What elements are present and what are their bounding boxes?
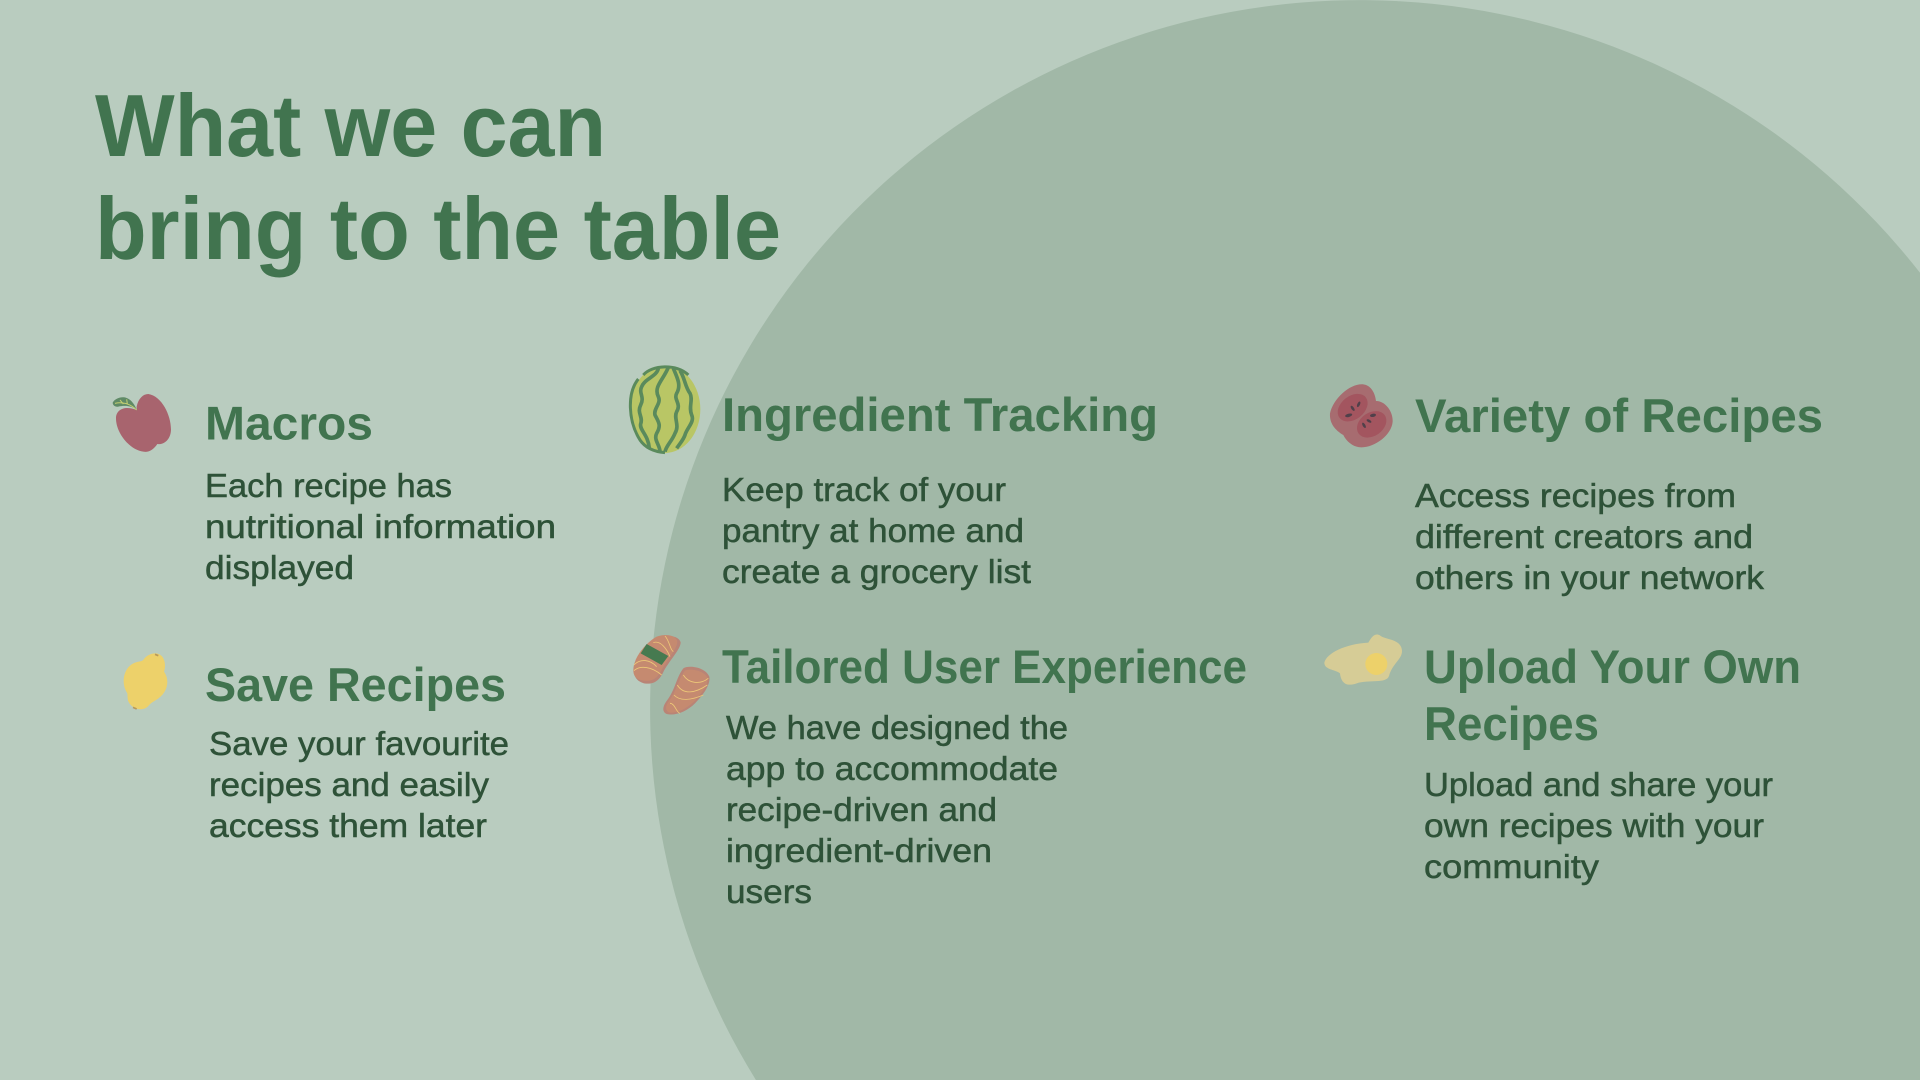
text: macros description: Each recipe has (205, 467, 452, 504)
text: variety of recipes description: Access recipes from (1415, 477, 1736, 514)
icon: fried egg (1324, 634, 1402, 685)
text: tailored user experience description: app to accommodate (726, 750, 1058, 787)
title (95, 76, 781, 278)
heading: upload your own recipes: Upload Your Own (1424, 640, 1801, 693)
icon: apple (113, 394, 171, 452)
panel: macros (113, 394, 556, 586)
background circle (650, 0, 1920, 1080)
text: upload your own recipes description: own recipes with your (1424, 807, 1764, 844)
text: upload your own recipes description: community (1424, 848, 1600, 885)
heading: variety of recipes: Variety of Recipes (1415, 389, 1823, 442)
text: macros description: nutritional information (205, 508, 556, 545)
text: variety of recipes description (1415, 477, 1765, 596)
panel: ingredient tracking (630, 366, 1158, 590)
heading: ingredient tracking: Ingredient Tracking (722, 388, 1158, 441)
panel: tailored user experience (633, 635, 1247, 910)
icon: tomato (1330, 384, 1393, 447)
text: upload your own recipes description: Upload and share your (1424, 766, 1773, 803)
heading: save recipes: Save Recipes (205, 658, 506, 711)
text: tailored user experience description: We have designed the (726, 709, 1068, 746)
heading: macros: Macros (205, 396, 373, 450)
panel: upload your own recipes (1324, 634, 1801, 885)
icon: watermelon (630, 366, 700, 453)
text: tailored user experience description: recipe-driven and (726, 791, 997, 828)
text: upload your own recipes description (1424, 766, 1773, 885)
text: ingredient tracking description: create a grocery list (722, 553, 1031, 590)
text: tailored user experience description: users (726, 873, 812, 910)
text: macros description (205, 467, 556, 586)
text: save recipes description: recipes and easily (209, 766, 490, 803)
text: tailored user experience description (726, 709, 1068, 910)
text: variety of recipes description: different creators and (1415, 518, 1753, 555)
panel: save recipes (124, 653, 509, 844)
text: save recipes description (209, 725, 509, 844)
text: save recipes description: access them later (209, 807, 487, 844)
icon: lemon (124, 653, 167, 709)
panel: variety of recipes (1330, 384, 1823, 596)
title: bring to the table (95, 179, 781, 278)
title: What we can (95, 76, 606, 175)
text: ingredient tracking description: Keep track of your (722, 471, 1006, 508)
text: save recipes description: Save your favourite (209, 725, 509, 762)
heading: upload your own recipes: Recipes (1424, 697, 1599, 750)
heading: tailored user experience: Tailored User Experience (722, 640, 1247, 693)
text: tailored user experience description: ingredient-driven (726, 832, 992, 869)
icon: salmon nigiri (633, 635, 710, 714)
text: ingredient tracking description: pantry at home and (722, 512, 1024, 549)
heading: upload your own recipes (1424, 640, 1801, 750)
text: variety of recipes description: others in your network (1415, 559, 1765, 596)
text: macros description: displayed (205, 549, 354, 586)
text: ingredient tracking description (722, 471, 1031, 590)
